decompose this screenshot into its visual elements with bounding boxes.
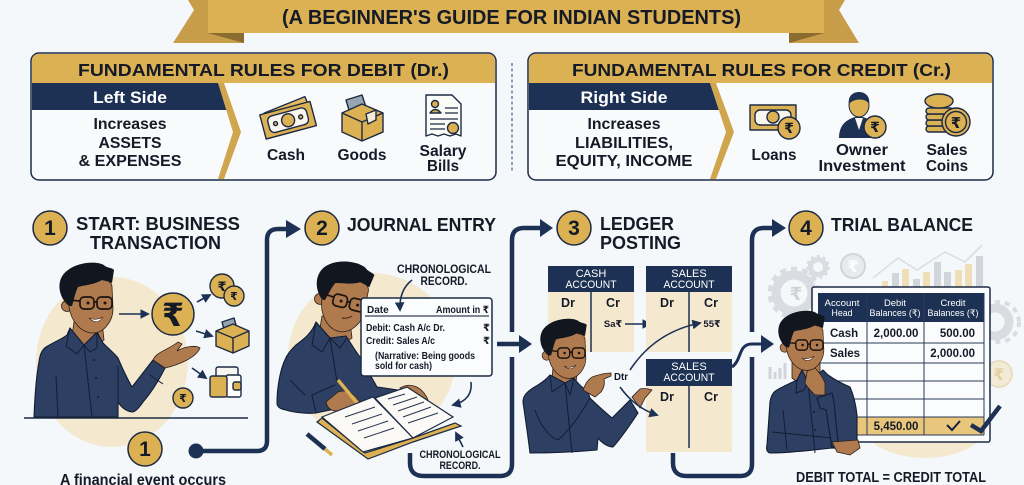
icon: loans <box>750 105 800 139</box>
trial balance table: Sales <box>830 348 860 360</box>
left side band <box>32 83 228 110</box>
journal entry box: sold for cash) <box>375 361 432 372</box>
ledger: sales account top: 55₹ <box>703 319 721 330</box>
step 1 badge <box>33 211 67 245</box>
journal entry box: (Narrative: Being goods <box>375 351 475 362</box>
trial balance table: 5,450.00 <box>874 421 918 433</box>
ledger: sales account bottom: ACCOUNT <box>664 372 715 384</box>
step 2 badge: 2 <box>316 217 328 240</box>
step 1 badge: 1 <box>44 217 56 240</box>
decor: gears, coins and growth chart: ₹ <box>993 367 1005 384</box>
arrow: to wallet <box>192 368 206 378</box>
journal entry box: ₹ <box>483 323 490 334</box>
step 2: journal entry <box>277 211 501 472</box>
connector: step 2 to step 3 <box>410 219 553 476</box>
arrow: to coins <box>197 295 210 302</box>
icon: cash <box>260 97 316 139</box>
step 4 badge <box>789 211 823 245</box>
trial balance table: 2,000.00 <box>874 328 918 340</box>
trial balance table: Credit <box>940 298 966 308</box>
credit rule text <box>556 116 693 170</box>
step 3 badge: 3 <box>568 217 580 240</box>
owner investment label <box>818 142 906 175</box>
large rupee coin: ₹ <box>162 297 184 333</box>
step 2 badge <box>305 211 339 245</box>
debit rule text <box>78 116 182 170</box>
salary bills label: Salary <box>420 143 467 160</box>
arrow: to coin <box>119 313 148 315</box>
trial balance table: 500.00 <box>940 328 975 340</box>
arrow: box to book <box>453 382 471 405</box>
debit rule text: ASSETS <box>98 135 162 152</box>
person presenting <box>34 263 200 417</box>
trial balance table: Balances (₹) <box>928 308 978 318</box>
ledger: sales account bottom: SALES <box>671 361 707 373</box>
chronological label top <box>397 262 491 288</box>
ledger: cash account: Cr <box>606 296 620 310</box>
ledger: cash account: ACCOUNT <box>566 279 617 291</box>
left side label: Left Side <box>93 89 167 107</box>
ledger: sales account top <box>646 266 732 352</box>
connector: step 1 to step 2 <box>188 220 301 458</box>
icon: loans: ₹ <box>784 120 794 136</box>
journal entry box: Amount in ₹ <box>436 305 489 316</box>
trial balance table: Debit <box>884 298 907 308</box>
loose pen <box>307 434 332 455</box>
chevron <box>218 83 241 179</box>
ledger: cash account <box>548 266 634 352</box>
sales coins label: Coins <box>926 158 968 175</box>
decor: gears, coins and growth chart <box>770 245 1019 387</box>
icon: small coin: ₹ <box>179 393 187 405</box>
icon: coins: ₹ <box>217 279 227 294</box>
event badge <box>128 432 162 466</box>
arrow: record to box <box>400 280 412 310</box>
goods label: Goods <box>338 147 387 164</box>
icon: sales coins <box>925 94 970 136</box>
journal entry box: ₹ <box>483 336 490 347</box>
connector: step 3 to step 4 <box>673 219 786 476</box>
decor: gears, coins and growth chart: ₹ <box>847 259 859 276</box>
salary bills label: Bills <box>427 158 459 175</box>
trial balance table: Head <box>832 308 852 318</box>
person thinking <box>767 311 860 455</box>
journal entry box <box>361 298 492 376</box>
trial balance table: Balances (₹) <box>870 308 920 318</box>
trial balance table: Account <box>824 298 860 308</box>
icon: sales coins: ₹ <box>951 115 961 132</box>
pointer label: Dtr <box>614 372 628 383</box>
open ledger book <box>317 387 461 459</box>
chronological label top: RECORD. <box>420 274 468 288</box>
arrow: to box <box>196 331 212 336</box>
ledger: sales account top: SALES <box>671 268 707 280</box>
credit rule text: Increases <box>588 116 660 133</box>
journal entry box: Debit: Cash A/c Dr. <box>366 323 445 334</box>
icon: wallet <box>210 367 241 397</box>
chronological label bottom <box>420 449 501 472</box>
step 1 heading: START: BUSINESS <box>76 214 240 234</box>
chevron <box>710 83 734 179</box>
credit rule text: LIABILITIES, <box>575 135 673 152</box>
title banner <box>173 0 859 43</box>
arrow: cash to sales <box>625 323 650 325</box>
step 3 heading: POSTING <box>600 233 681 253</box>
person writing <box>277 255 428 420</box>
chronological label bottom: CHRONOLOGICAL <box>420 449 501 461</box>
pen in hand <box>338 380 367 415</box>
trial balance table <box>812 287 990 442</box>
owner investment label: Investment <box>818 158 906 175</box>
sales coins label <box>926 142 968 175</box>
step 3: ledger posting <box>523 211 732 453</box>
icon: owner: ₹ <box>870 119 880 135</box>
chronological label bottom: RECORD. <box>440 460 480 472</box>
ledger: sales account bottom <box>646 359 732 452</box>
sales coins label: Sales <box>926 142 968 159</box>
big check mark <box>971 406 1000 431</box>
credit heading: FUNDAMENTAL RULES FOR CREDIT (Cr.) <box>572 60 951 80</box>
step 1: business transaction <box>24 211 249 485</box>
chronological label top: CHRONOLOGICAL <box>397 262 491 276</box>
debit rule text: & EXPENSES <box>78 153 182 170</box>
step 4 badge: 4 <box>800 217 812 240</box>
icon: owner <box>839 92 886 138</box>
large rupee coin <box>152 293 194 335</box>
ledger: cash account: CASH <box>576 268 606 280</box>
panel: debit rules <box>31 53 496 180</box>
journal entry box: Date <box>367 305 389 316</box>
icon: box <box>216 318 249 353</box>
ledger: cash account: Dr <box>561 296 575 310</box>
icon: coins: ₹ <box>230 291 238 303</box>
debit heading: FUNDAMENTAL RULES FOR DEBIT (Dr.) <box>78 60 449 80</box>
salary bills label <box>420 143 467 175</box>
arrow: curve to sales debit <box>620 387 657 415</box>
person pointing <box>523 319 652 453</box>
cash label: Cash <box>267 147 305 164</box>
right side band <box>529 83 719 110</box>
step 2 heading: JOURNAL ENTRY <box>347 215 496 235</box>
icon: salary bill <box>426 95 461 136</box>
event badge: 1 <box>139 438 151 461</box>
ledger: cash account: Sa₹ <box>604 319 623 330</box>
subtitle: (A BEGINNER'S GUIDE FOR INDIAN STUDENTS) <box>282 7 741 29</box>
icon: goods <box>342 95 383 141</box>
step 3 heading <box>600 214 681 253</box>
step 3 badge <box>557 211 591 245</box>
step 1 heading: TRANSACTION <box>90 233 221 253</box>
ledger: sales account top: Dr <box>660 296 674 310</box>
journal entry box: Credit: Sales A/c <box>366 336 435 347</box>
step 1 heading <box>76 214 240 253</box>
ledger: sales account bottom: Dr <box>660 390 674 404</box>
debit rule text: Increases <box>94 116 166 133</box>
step 3 heading: LEDGER <box>600 214 674 234</box>
icon: small coin <box>173 388 193 408</box>
credit rule text: EQUITY, INCOME <box>556 153 693 170</box>
owner investment label: Owner <box>836 142 888 159</box>
ledger: sales account top: Cr <box>704 296 718 310</box>
step 4 heading: TRIAL BALANCE <box>831 215 973 235</box>
decor: gears, coins and growth chart: ₹ <box>790 284 802 304</box>
loans label: Loans <box>752 147 797 164</box>
step 4: trial balance <box>767 211 1019 485</box>
right side label: Right Side <box>580 89 668 107</box>
trial balance table: 2,000.00 <box>930 348 975 360</box>
icon: coins <box>210 274 244 306</box>
arrow: label to book <box>456 433 463 447</box>
trial balance table: Cash <box>830 328 858 340</box>
panel: credit rules <box>528 53 993 180</box>
arrow: curve to sales credit <box>630 323 700 370</box>
ledger: sales account top: ACCOUNT <box>664 279 715 291</box>
ledger: sales account bottom: Cr <box>704 390 718 404</box>
